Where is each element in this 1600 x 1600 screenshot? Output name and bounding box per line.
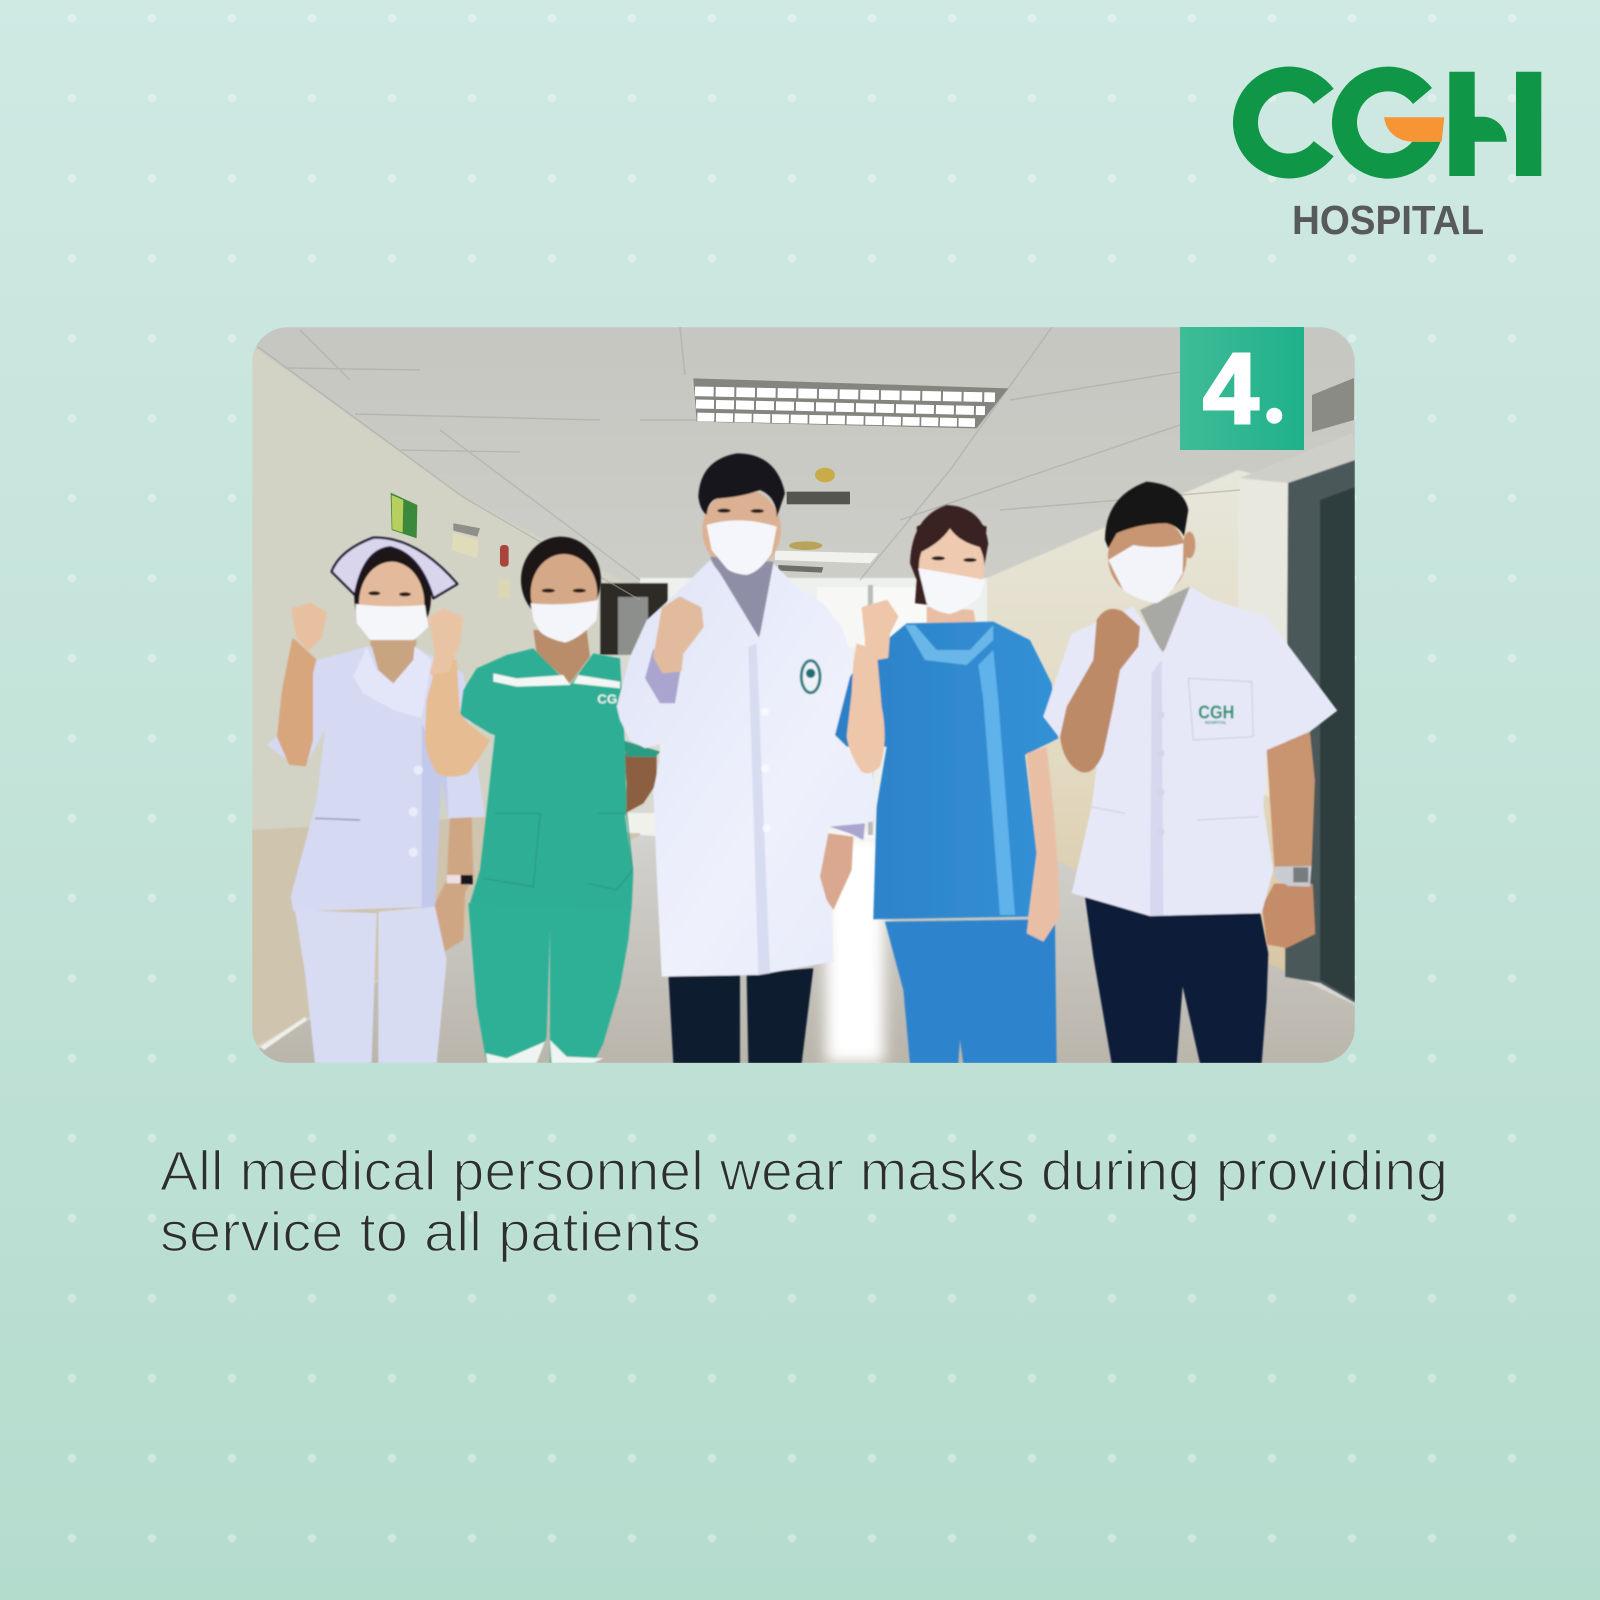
man uniform (1043, 587, 1337, 1063)
green scrubs badge text: CG (597, 691, 617, 706)
blue scrubs uniform (835, 622, 1058, 1063)
nurse uniform (267, 640, 485, 1063)
hallway background (252, 327, 1355, 1063)
badge: step number 4 (1180, 327, 1304, 450)
panel: staff photo (252, 327, 1355, 1063)
caption text (160, 1139, 1448, 1263)
caption text: All medical personnel wear masks during providing (160, 1139, 1448, 1202)
logo orange accent (1384, 117, 1444, 142)
doctor coat (617, 560, 877, 977)
blue scrubs mask (918, 568, 985, 614)
doctor head (702, 488, 781, 572)
doctor mask (707, 520, 777, 575)
logo letter H (1449, 72, 1541, 176)
person: staff in white short-sleeve shirt (1043, 482, 1337, 1063)
nurse head (291, 536, 460, 650)
man forearm and fist (1060, 609, 1140, 773)
man head (1105, 482, 1195, 653)
person: staff in blue scrubs (835, 505, 1060, 1063)
ceiling panel lines (258, 327, 1240, 600)
wristwatch (1275, 866, 1312, 887)
badge: step number 4: 4. (1203, 333, 1286, 445)
ceiling light fixture (693, 378, 1008, 573)
green scrubs mask (531, 600, 598, 643)
person: nurse in lavender (267, 538, 485, 1063)
logo letter C (1245, 79, 1324, 166)
green scrubs uniform (425, 648, 660, 1063)
exit sign and wall fixtures (391, 493, 510, 598)
nurse mask (356, 604, 428, 647)
logo letter G (1332, 67, 1441, 179)
doctor trousers (668, 968, 813, 1063)
man uniform: HOSPITAL (1205, 720, 1227, 726)
person: nurse in green scrubs (425, 537, 660, 1063)
nurse cap (332, 538, 457, 598)
person: doctor in white coat (617, 453, 877, 1063)
logo: CGH Hospital (1245, 67, 1541, 243)
nurse fist (293, 605, 325, 648)
doctor cuff and fist (645, 648, 682, 703)
man mask (1108, 543, 1183, 603)
blue scrubs arm and fist (1027, 747, 1060, 942)
doctor emblem (801, 661, 820, 693)
blue scrubs head (910, 505, 988, 640)
green scrubs fist (430, 610, 462, 673)
logo word HOSPITAL: HOSPITAL (1292, 197, 1484, 243)
caption text: service to all patients (160, 1200, 701, 1263)
air vent (1312, 378, 1354, 432)
doctor hand (820, 823, 865, 910)
green scrubs head (521, 537, 601, 683)
pocket logo text: CGH (1198, 701, 1234, 722)
